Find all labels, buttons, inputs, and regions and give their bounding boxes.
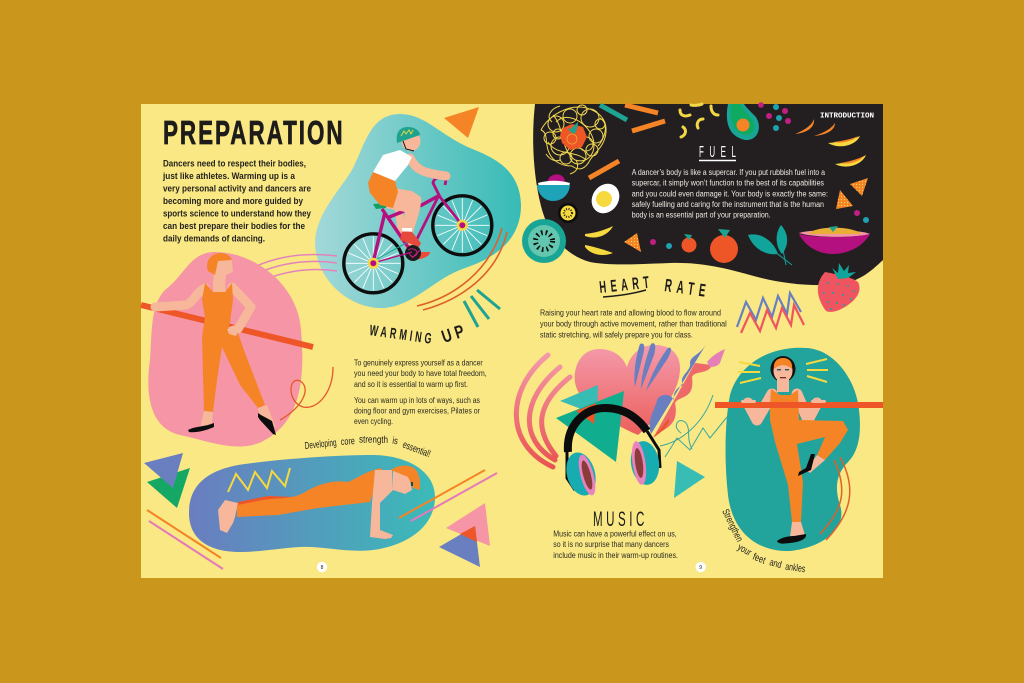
headphones [562,408,662,499]
heading: rate: RATE [663,276,712,302]
pink motion arcs [252,254,337,283]
thin teal lines [660,395,727,457]
back shoe [408,251,430,260]
heart rate text [540,308,727,339]
wave ribbon blue [650,343,707,434]
rear wheel [344,234,403,293]
heart rate text: static stretching, will safely prepare you for class. [540,330,693,339]
blue feathers [634,343,671,391]
heading: music: MUSIC [593,507,648,531]
left cup [562,449,600,499]
raised foot [806,455,825,473]
page number 8 [317,562,327,572]
barre [141,305,313,347]
heading: heart: HEART [598,273,654,297]
light teal triangle [560,385,598,415]
saddle [373,203,387,209]
triangle pair left [144,453,190,508]
headphones behind head [770,356,796,382]
music text: include music in their warm-up routines. [553,551,678,560]
warming up text: You can warm up in lots of ways, such as [354,396,480,405]
arm [370,470,393,539]
zigzag pair [737,293,804,333]
shirt [373,150,412,181]
fuel text: A dancer’s body is like a supercar. If you put rubbish fuel into a [632,168,826,177]
intro text: can best prepare their bodies for the [163,221,305,231]
panel: music [516,343,727,560]
egg [586,178,625,219]
lines bottom right [399,470,497,521]
arm right [231,287,251,331]
intro text: Dancers need to respect their bodies, [163,158,306,168]
warming up text: you need your body to have total freedom, [354,369,487,378]
music text: Music can have a powerful effect on us, [553,529,677,538]
face [774,360,792,382]
hair [774,358,792,369]
yellow face rays [738,359,828,383]
fuel text: safely fuelling and caring for the instrument that is the human [632,200,824,209]
yellow zigzag [228,468,290,492]
caption: strengthen: feet [751,552,767,567]
fuel text [632,168,828,220]
leotard [202,283,265,412]
arm left [748,394,772,420]
arm right [797,394,817,420]
eyes and mouth [777,369,789,378]
big tomato [710,229,738,263]
front hand over bar [227,328,240,336]
macaroni [680,104,718,137]
hair [207,253,232,275]
warming up text: and so it is essential to warm up first. [354,380,468,389]
heart rate text: your body through active movement, rather than traditional [540,319,727,328]
heart [575,345,680,435]
plank blob [189,455,435,552]
hands [741,400,826,403]
eye [411,482,413,486]
orange triangle [444,107,479,138]
fuel text: and you could even damage it. Your body is exactly the same: [632,189,828,198]
berries [758,102,791,131]
caption: core strength: strength [359,435,388,446]
intro text: very personal activity and dancers are [163,184,311,194]
caption: strengthen: your [736,542,754,559]
avocado [727,104,759,140]
right cup [628,439,662,487]
arm [410,158,446,176]
heading: fuel: FUEL [699,143,741,161]
caption: core strength: is [392,436,399,447]
caption: core strength: core [340,436,355,448]
body [237,468,382,517]
feet [218,500,238,533]
page number 8: 8 [321,565,324,571]
fuel text: supercar, it simply won’t function to the best of its capabilities [632,179,824,188]
green triangle [556,391,624,462]
intro text [162,158,311,244]
red arcs [820,457,850,540]
back leg [398,205,412,252]
teal dashes [464,290,500,327]
lines bottom left [147,510,223,569]
red swoosh lines [417,228,507,310]
standing foot [200,411,213,428]
wave ribbon pink [707,349,725,367]
hair [391,465,420,490]
spaghetti [541,105,606,174]
caption: strengthen: and [768,557,783,571]
nachos [624,178,868,252]
orange bars [589,105,665,178]
strap [403,141,414,151]
orange slices [795,119,866,167]
leotard [770,389,848,522]
teal bar [600,105,627,120]
intro text: becoming more and more guided by [163,196,303,206]
intro text: just like athletes. Warming up is a [162,171,295,181]
dots right [650,210,869,249]
pointed foot [258,405,276,428]
teal blob [315,114,521,308]
heading: warming up: WARMING [368,322,436,348]
page number 9: 9 [699,565,702,571]
arm left [155,288,205,307]
small kiwi [558,203,578,223]
warming up text [354,358,487,426]
panel: heart rate [540,273,804,339]
small tomato [682,234,696,252]
book spread [141,104,883,578]
crank [405,245,421,261]
face [393,470,412,494]
sound arcs [516,355,570,467]
caption: strengthen [719,507,806,575]
page number 9 [696,562,706,572]
bananas [585,226,613,255]
neck and face [210,256,233,292]
front wheel [433,196,492,255]
tomato in spaghetti [560,122,587,150]
wave ribbon red [653,363,712,438]
big kiwi [522,219,566,263]
neck [777,378,789,392]
panel: fuel [522,102,883,312]
bike frame [373,178,462,263]
intro text: sports science to understand how they [163,208,311,218]
front shoe [400,231,421,247]
plank dancer [218,465,420,539]
fuel text: body is an essential part of your preparation. [632,211,771,220]
panel: right dancer [696,348,883,575]
title: PREPARATION [163,114,345,151]
heart rate text: Raising your heart rate and allowing blood to flow around [540,308,721,318]
ribbon orange base [653,418,669,438]
barre [715,402,883,408]
music text [553,529,678,560]
head [402,131,420,151]
pink blob [148,252,302,446]
hubs [368,220,468,269]
heading: warming up [368,321,470,348]
music text: so it is no surprise that many dancers [553,540,669,549]
dancer at barre [715,356,883,544]
rice bowl [799,226,870,254]
black food blob [533,104,883,285]
triangle pair right [439,503,490,567]
small bowl [537,174,570,201]
heading underline [603,290,646,297]
warming up text: even cycling. [354,417,393,426]
warming up text: To genuinely express yourself as a dancer [354,358,483,368]
intro text: daily demands of dancing. [163,234,265,244]
panel: left page [141,107,521,572]
front leg [386,188,421,233]
helmet [397,127,420,143]
red triangle [576,403,596,424]
caption: core strength: Developing [304,438,337,452]
caption: core strength: essential! [401,440,432,460]
teal blob [726,348,860,551]
caption: strengthen: Strengthen [719,507,745,544]
caption: core strength [304,435,432,460]
leaves [748,225,792,265]
standing foot [790,522,805,537]
cyclist illustration [344,127,492,293]
caption: strengthen: ankles [785,562,806,575]
red scribble [280,367,333,420]
ballet dancer at barre [141,253,313,435]
introduction label: INTRODUCTION [820,112,874,120]
heading: warming up: UP [439,321,470,347]
red leg stripe [238,496,295,507]
warming up text: doing floor and gym exercises, Pilates or [354,406,480,415]
shorts [368,172,398,208]
teal play triangle [674,461,705,498]
strawberry [818,263,860,312]
